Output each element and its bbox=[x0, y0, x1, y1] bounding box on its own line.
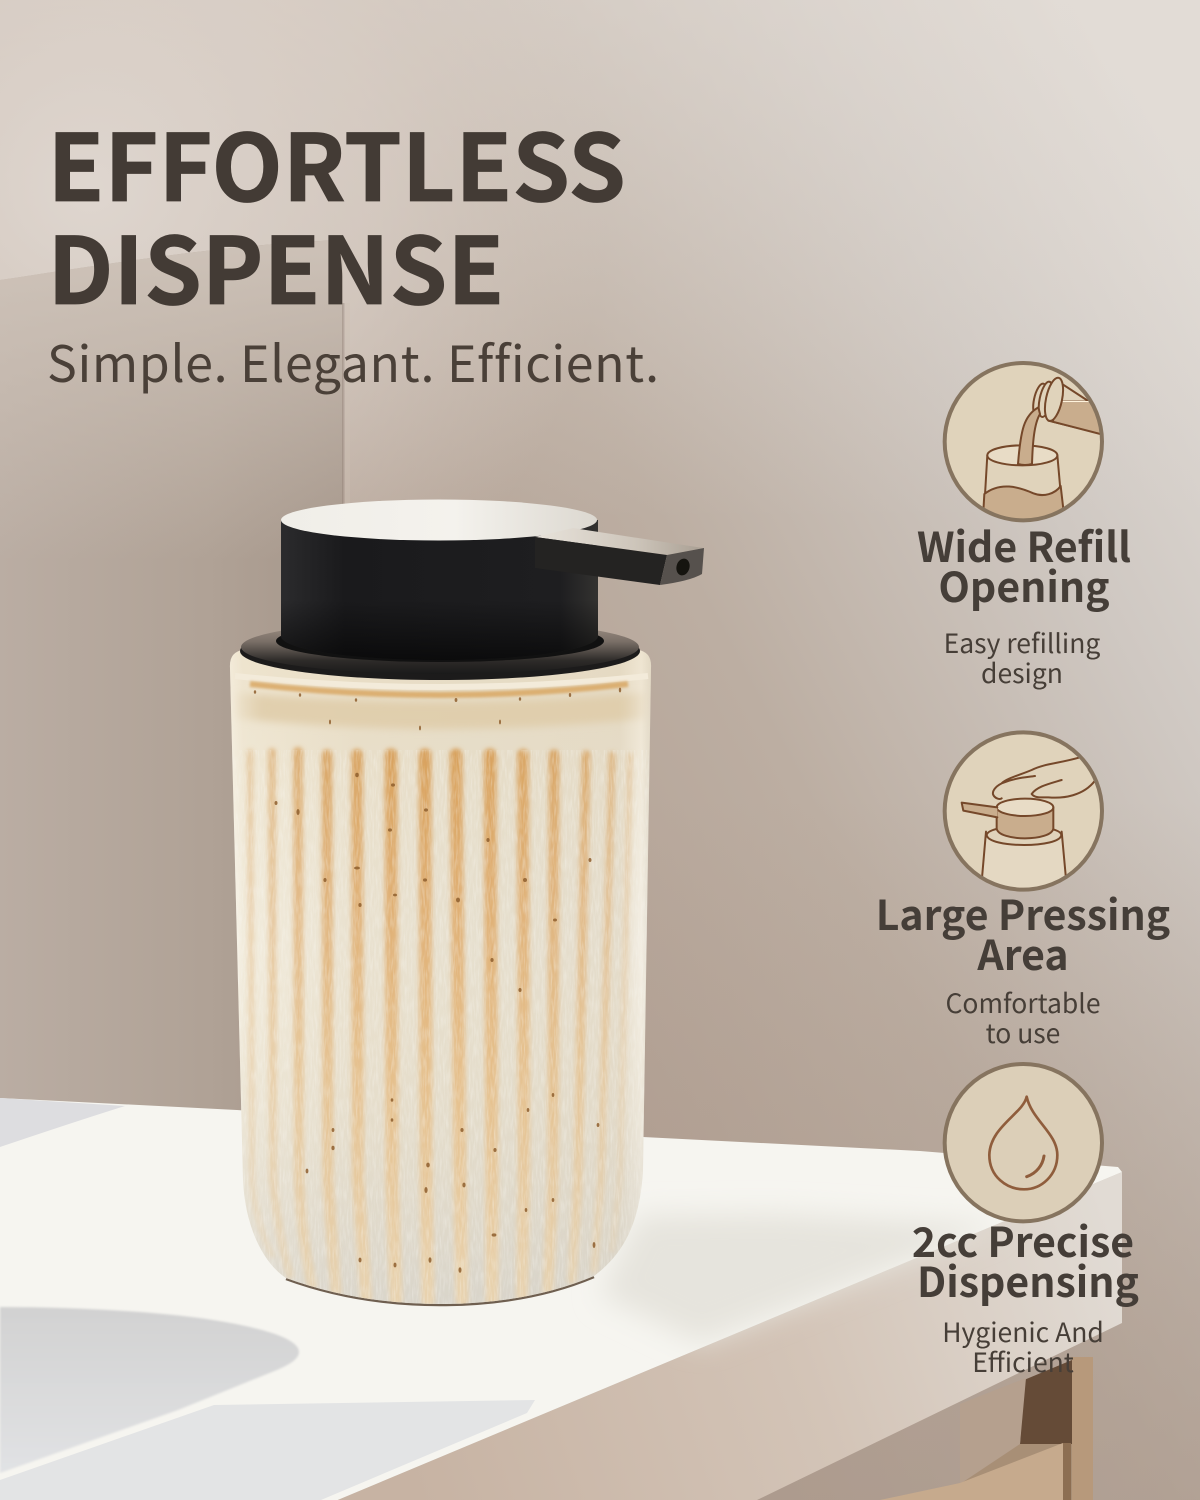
counter front face bbox=[321, 1172, 1122, 1500]
heading: Large Pressing bbox=[876, 882, 1170, 942]
feature: wide refill opening bbox=[917, 363, 1131, 691]
icon: droplet bbox=[945, 1064, 1102, 1221]
title: EFFORTLESS bbox=[48, 94, 626, 228]
subtitle: Simple. Elegant. Efficient. bbox=[47, 325, 660, 397]
description: Comfortable bbox=[945, 982, 1101, 1021]
vanity cabinet bbox=[880, 1357, 1093, 1500]
heading: Opening bbox=[938, 554, 1110, 614]
heading bbox=[917, 514, 1131, 614]
heading: Dispensing bbox=[917, 1249, 1139, 1309]
title bbox=[48, 94, 626, 331]
heading: Area bbox=[976, 922, 1069, 982]
icon: pouring liquid into bottle bbox=[945, 363, 1113, 523]
glaze speckles bbox=[254, 688, 621, 1273]
feature: large pressing area bbox=[876, 732, 1170, 1051]
description: design bbox=[981, 652, 1063, 691]
black pump head bbox=[281, 500, 598, 660]
metal collar ring bbox=[240, 620, 640, 680]
heading bbox=[876, 882, 1170, 982]
feature: 2cc precise dispensing bbox=[912, 1064, 1139, 1380]
description bbox=[942, 1311, 1104, 1380]
description bbox=[944, 622, 1100, 691]
heading: 2cc Precise bbox=[912, 1209, 1134, 1269]
background wall box corner bbox=[0, 240, 350, 1115]
title: DISPENSE bbox=[48, 197, 504, 331]
description bbox=[945, 982, 1101, 1051]
description: Efficient bbox=[972, 1341, 1074, 1380]
heading: Wide Refill bbox=[917, 514, 1131, 574]
icon: hand pressing pump bbox=[945, 732, 1102, 893]
description: Easy refilling bbox=[944, 622, 1100, 661]
description: to use bbox=[986, 1012, 1060, 1051]
ceramic body bbox=[228, 645, 654, 1310]
pump spout bbox=[535, 528, 704, 585]
soap dispenser bbox=[228, 500, 704, 1310]
description: Hygienic And bbox=[942, 1311, 1104, 1350]
heading bbox=[912, 1209, 1139, 1309]
counter top surface bbox=[0, 1098, 1122, 1500]
